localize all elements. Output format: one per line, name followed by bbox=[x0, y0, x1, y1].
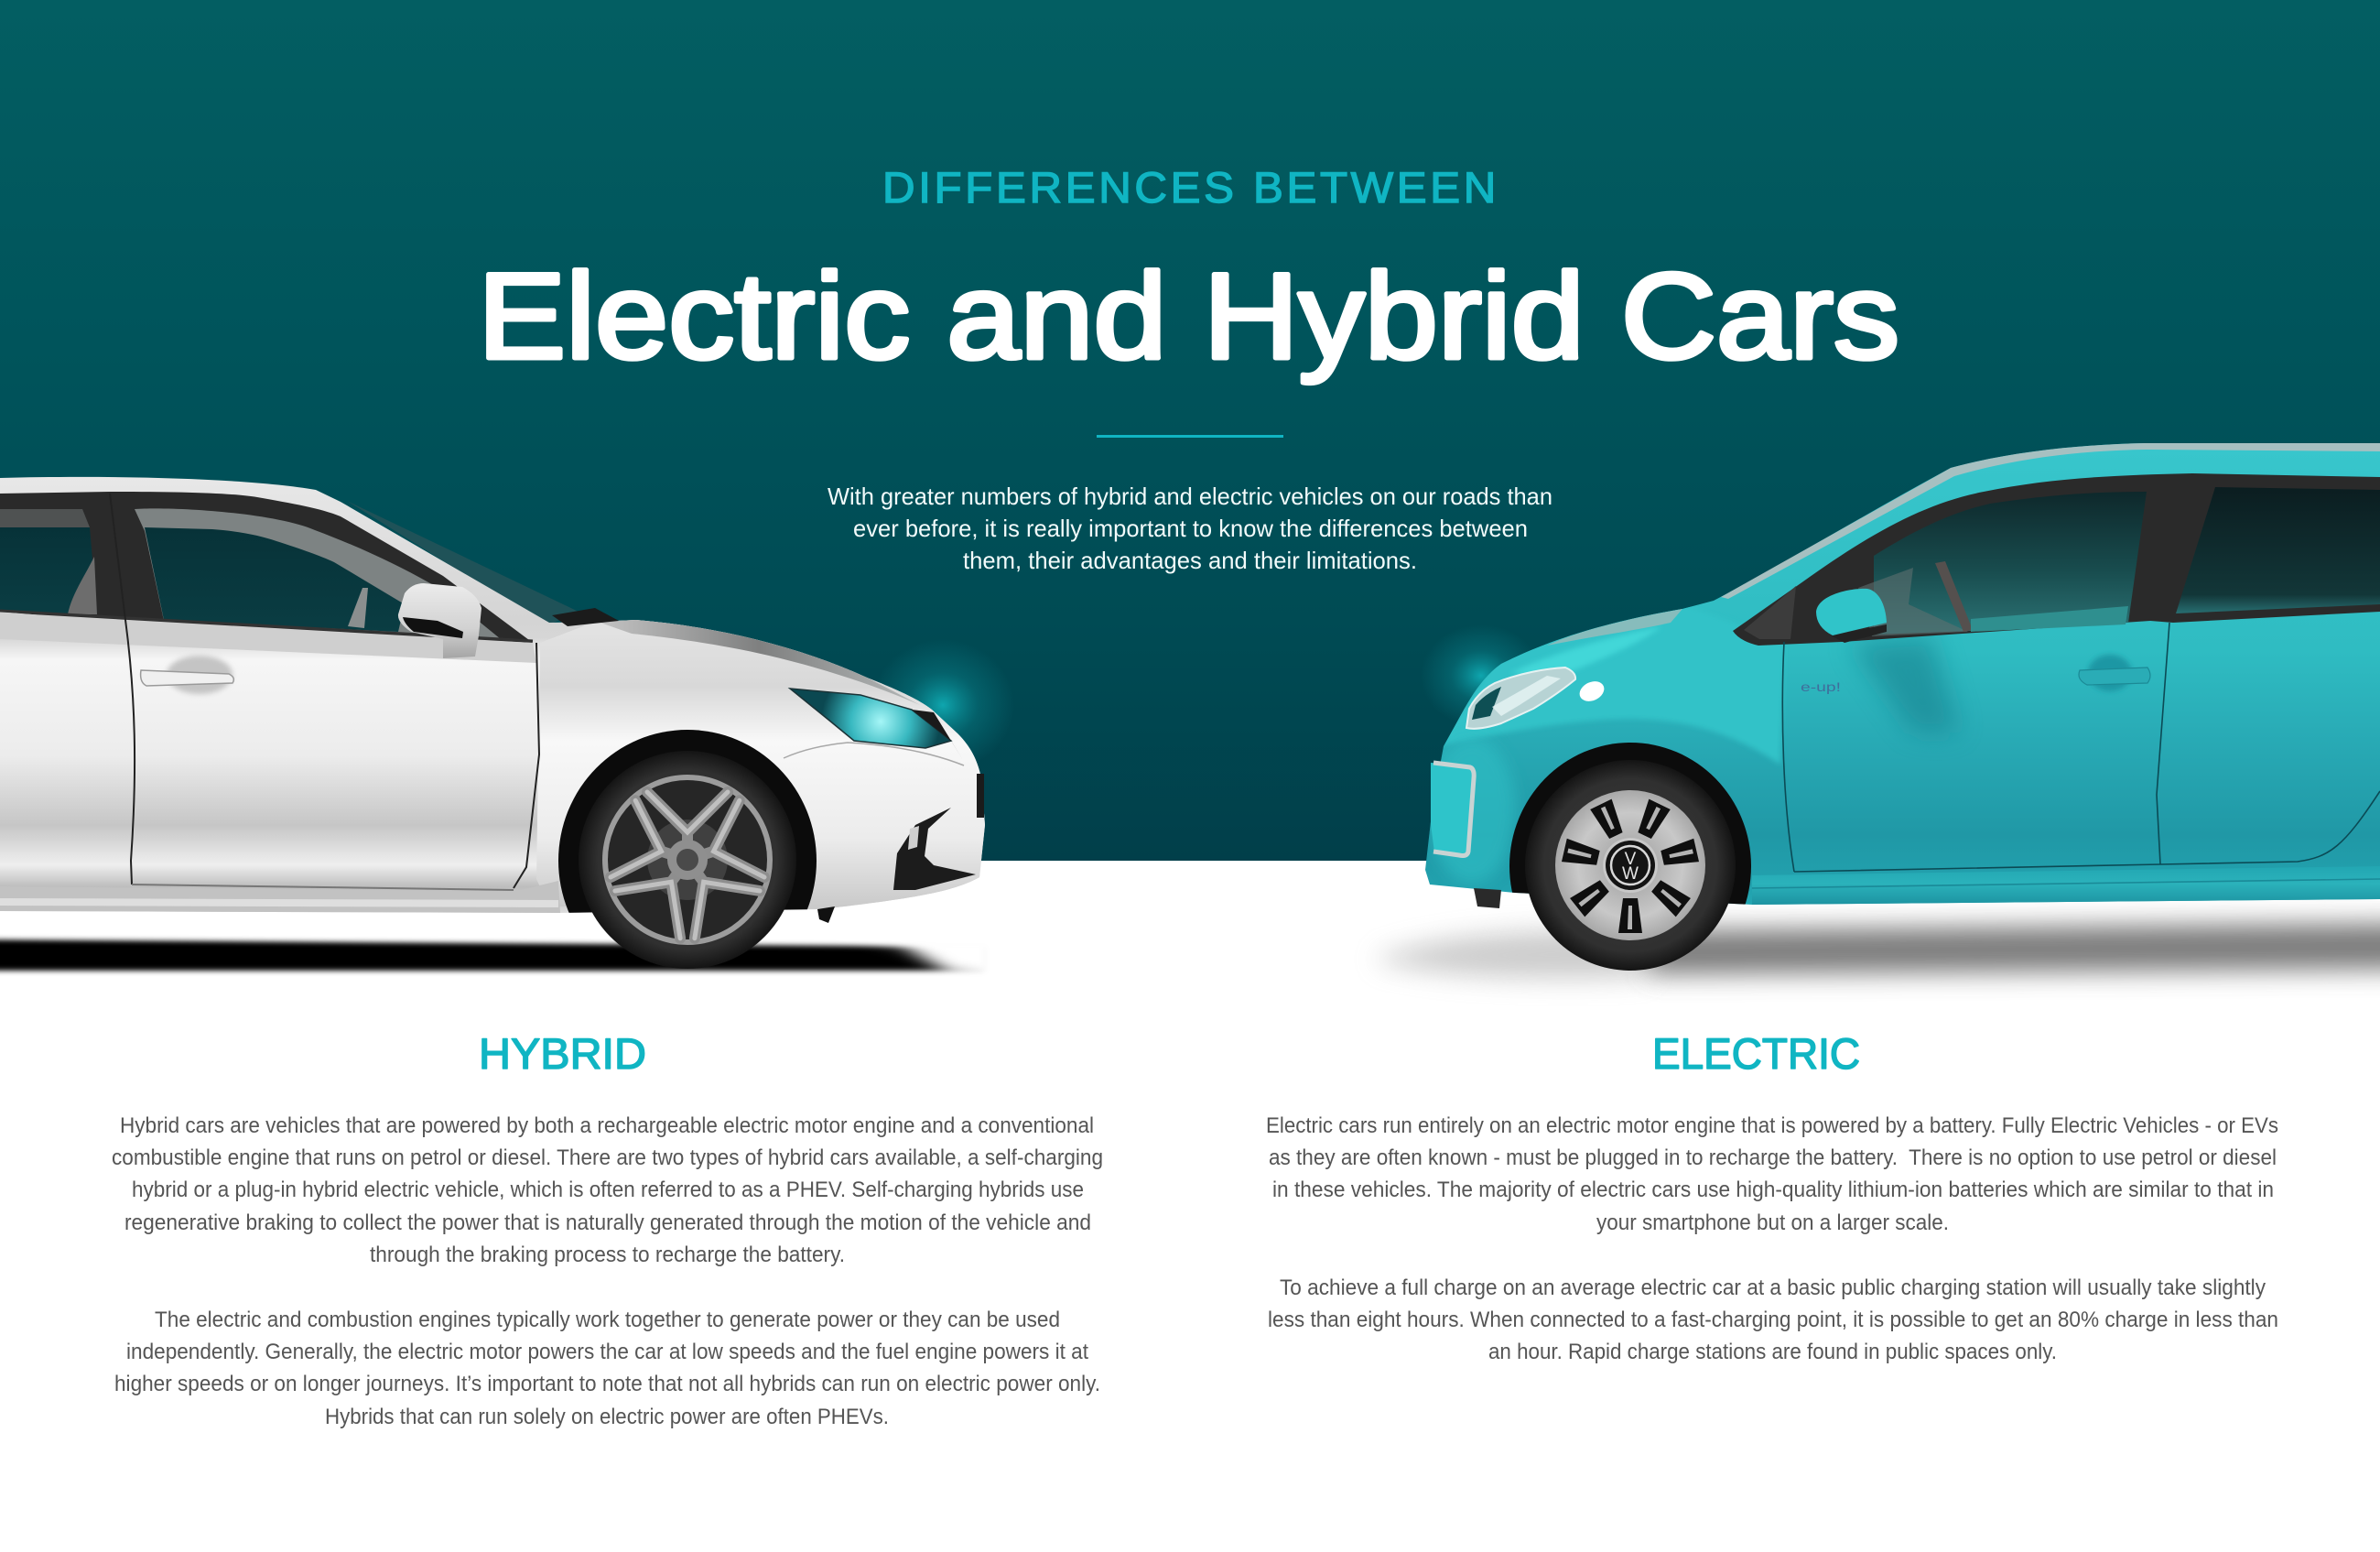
hybrid car wheel arch bbox=[558, 730, 817, 913]
electric car rear side glass bbox=[2176, 487, 2380, 613]
hybrid shadow fade mask bbox=[842, 929, 998, 984]
hybrid body text: hybrid or a plug-in hybrid electric vehicle, which is often referred to as a PHEV. Self-charging hybrids use bbox=[132, 1178, 1084, 1202]
electric car bonnet and upper wing bbox=[1428, 604, 1784, 884]
electric car front wheel bbox=[1525, 760, 1736, 971]
electric body text: Electric cars run entirely on an electric motor engine that is powered by a battery. Fully Electric Vehicles - or EVs bbox=[1266, 1113, 2278, 1138]
hybrid car door shut lines bbox=[110, 494, 539, 890]
hybrid car front seat headrest bbox=[348, 588, 368, 628]
electric car front wheel: V bbox=[1625, 850, 1637, 869]
electric body text bbox=[1266, 1113, 2278, 1364]
hybrid body text: Hybrids that can run solely on electric power are often PHEVs. bbox=[325, 1405, 889, 1429]
hybrid car wiper bbox=[552, 608, 619, 626]
eyebrow heading: DIFFERENCES BETWEEN bbox=[882, 163, 1499, 212]
title: Electric and Hybrid Cars bbox=[478, 249, 1899, 385]
electric car wheel arch bbox=[1509, 743, 1751, 905]
hybrid car window trim bbox=[135, 508, 501, 639]
hybrid body text: combustible engine that runs on petrol or diesel. There are two types of hybrid cars available, a self-charging bbox=[112, 1145, 1103, 1170]
hybrid car number plate edge bbox=[977, 774, 984, 818]
hybrid car rear side glass bbox=[0, 527, 97, 614]
electric body text: your smartphone but on a larger scale. bbox=[1596, 1210, 1949, 1235]
electric car bonnet highlight bbox=[1510, 626, 1661, 678]
electric car headlight glow bbox=[1421, 624, 1542, 727]
electric car sill bbox=[1752, 866, 2380, 905]
hybrid car bumper seam bbox=[784, 743, 964, 765]
hybrid body text: Hybrid cars are vehicles that are powered by both a rechargeable electric motor engine and a conventional bbox=[120, 1113, 1094, 1138]
hybrid body text: through the braking process to recharge the battery. bbox=[370, 1243, 845, 1267]
electric car door handle bbox=[2079, 655, 2150, 691]
electric car front grille bbox=[1431, 763, 1476, 857]
electric car wing mirror bbox=[1816, 589, 1887, 643]
electric car door shut lines bbox=[1752, 623, 2380, 888]
hybrid car bbox=[0, 477, 985, 992]
intro text bbox=[828, 483, 1552, 574]
hybrid car front wheel bbox=[579, 751, 796, 969]
electric car front wheel: W bbox=[1622, 864, 1639, 884]
electric car quarter light bbox=[1744, 586, 1796, 639]
teal header band bbox=[0, 0, 2380, 861]
hybrid car door handle bbox=[141, 656, 233, 694]
hybrid car shadow bbox=[0, 939, 984, 971]
electric body text: less than eight hours. When connected to a fast-charging point, it is possible to get an 80% charge in less than bbox=[1268, 1308, 2278, 1332]
hybrid car mud flap bbox=[817, 906, 835, 923]
electric car headlight bbox=[1466, 667, 1575, 729]
hybrid car headlight glow bbox=[871, 639, 1014, 771]
electric body text: as they are often known - must be plugged in to recharge the battery. There is no option to use petrol or diesel bbox=[1269, 1145, 2277, 1170]
electric car roof rail bbox=[1721, 443, 2380, 599]
hybrid car windscreen bbox=[347, 501, 579, 624]
intro text: ever before, it is really important to know the differences between bbox=[853, 515, 1528, 542]
hybrid car belt line shade bbox=[0, 613, 536, 663]
electric body text: an hour. Rapid charge stations are found in public spaces only. bbox=[1488, 1340, 2057, 1364]
hybrid car window frames bbox=[0, 492, 533, 643]
hybrid heading: HYBRID bbox=[479, 1029, 646, 1078]
hybrid car front side glass bbox=[145, 527, 405, 632]
electric body text: in these vehicles. The majority of electric cars use high-quality lithium-ion batteries which are similar to that in bbox=[1272, 1178, 2274, 1202]
hybrid car headlight bbox=[790, 689, 963, 760]
intro text: With greater numbers of hybrid and electric vehicles on our roads than bbox=[828, 483, 1552, 510]
electric car bonnet shade bbox=[1547, 609, 1682, 646]
hybrid car rear window trim bbox=[0, 509, 90, 527]
hybrid body text: regenerative braking to collect the power that is naturally generated through the motion of the vehicle and bbox=[124, 1210, 1091, 1235]
hybrid car front wing bbox=[536, 620, 985, 909]
electric heading: ELECTRIC bbox=[1652, 1029, 1860, 1078]
hybrid body text: The electric and combustion engines typically work together to generate power or they can be used bbox=[155, 1308, 1060, 1332]
hybrid body text bbox=[112, 1113, 1103, 1429]
electric car bbox=[1425, 443, 2380, 990]
hybrid car rear seat bbox=[68, 557, 97, 614]
electric car shadow bbox=[1373, 923, 2380, 978]
electric car front side glass bbox=[1874, 492, 2147, 635]
hybrid car sill bbox=[0, 881, 560, 913]
electric car indicator bbox=[1576, 678, 1607, 705]
title divider bbox=[1097, 435, 1283, 438]
hybrid car fog lamp bbox=[908, 826, 919, 850]
intro text: them, their advantages and their limitations. bbox=[963, 547, 1417, 574]
hybrid car front intake bbox=[893, 808, 976, 890]
hybrid car wing mirror bbox=[398, 583, 481, 658]
hybrid body text: independently. Generally, the electric motor powers the car at low speeds and the fuel engine powers it at bbox=[126, 1340, 1088, 1364]
hybrid car body bbox=[0, 477, 985, 913]
electric car window frames bbox=[1733, 473, 2380, 646]
hybrid car bonnet shade bbox=[598, 620, 920, 705]
electric body text: To achieve a full charge on an average electric car at a basic public charging station will usually take slightly bbox=[1280, 1275, 2266, 1300]
electric car model badge: e-up! bbox=[1801, 679, 1841, 694]
electric car body bbox=[1425, 443, 2380, 905]
electric car interior seat and wheel bbox=[1858, 561, 2128, 636]
hybrid body text: higher speeds or on longer journeys. It’s important to note that not all hybrids can run on electric power only. bbox=[114, 1372, 1100, 1396]
electric car tow bracket bbox=[1474, 888, 1501, 908]
electric car door shadow bbox=[1849, 636, 1959, 733]
